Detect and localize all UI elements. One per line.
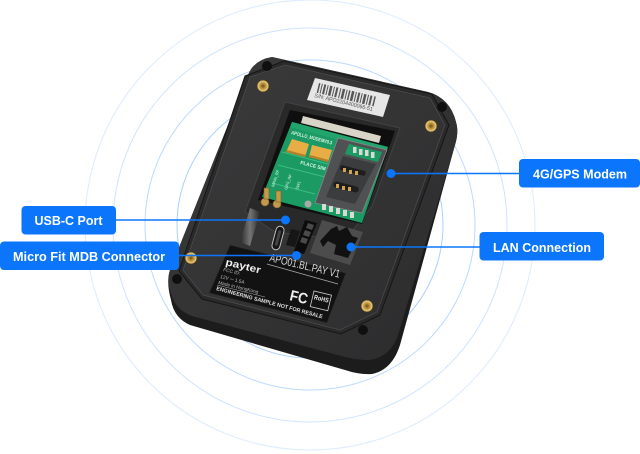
callout: 4G/GPS Modem: 4G/GPS Modem	[533, 166, 627, 182]
brand: payter	[224, 257, 262, 276]
LAN port	[310, 220, 363, 265]
spec text: 12V ⎓ 1.5A	[220, 274, 246, 286]
serial number: S/N: APO2204400066-51	[314, 93, 373, 113]
coax connectors	[261, 188, 281, 208]
serial sticker	[307, 78, 390, 117]
callout: 4G/GPS Modem	[386, 159, 640, 188]
device face	[183, 65, 445, 330]
circuit board: GPS_RF	[283, 173, 293, 190]
spec text: FCC ID:	[223, 267, 241, 277]
concentric rings	[85, 0, 535, 450]
brass inserts	[185, 80, 437, 312]
callout: LAN Connection	[346, 232, 604, 260]
outer bevel line	[179, 61, 449, 334]
capacitors	[286, 139, 332, 162]
SIM holder	[304, 138, 387, 218]
product label plate	[209, 245, 346, 323]
barcode	[317, 83, 376, 106]
circuit board: MAIN_RF	[270, 169, 281, 187]
recess cavity	[258, 110, 395, 224]
circuit board	[261, 122, 388, 223]
device lid	[168, 57, 457, 360]
callout: LAN Connection: LAN Connection	[493, 240, 591, 255]
callout: Micro Fit MDB Connector	[0, 242, 301, 270]
spec text	[218, 267, 259, 296]
circuit board: SW1	[294, 180, 302, 190]
USB-C port	[271, 225, 285, 251]
device body	[168, 57, 457, 374]
model name: APO01.BL.PAY V1	[268, 252, 341, 281]
screw holes	[172, 61, 447, 335]
spec text: Made in HongKong	[218, 280, 259, 296]
flex connector	[301, 116, 381, 143]
module recess	[245, 102, 400, 240]
callout: USB-C Port	[22, 206, 290, 234]
FCC mark: FC	[288, 287, 310, 308]
callout: USB-C Port: USB-C Port	[34, 213, 103, 228]
MDB connector	[286, 220, 317, 254]
device	[168, 57, 457, 374]
callout: Micro Fit MDB Connector: Micro Fit MDB Connector	[13, 249, 165, 264]
antenna cylinder	[240, 208, 260, 246]
circuit board: PLACE SIM	[299, 160, 326, 172]
board labels: APOLLO_MODEMV0.3	[290, 130, 333, 146]
RoHS mark: RoHS	[313, 294, 330, 305]
sample notice: ENGINEERING SAMPLE NOT FOR RESALE	[215, 286, 324, 320]
